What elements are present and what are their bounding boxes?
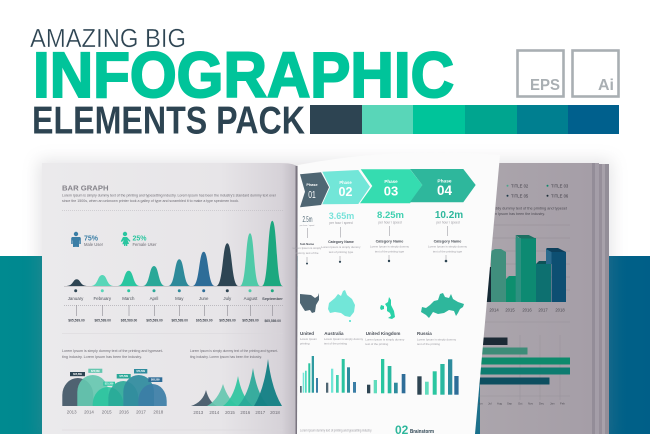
page stack edges — [592, 163, 609, 434]
peak chart — [191, 359, 282, 406]
country text: text of the printing — [324, 342, 347, 346]
category text: text of printing type — [329, 250, 354, 254]
phase metrics — [300, 210, 463, 227]
bar 2018 — [546, 248, 566, 302]
month labels: April — [150, 296, 158, 301]
phase metrics: per hour / speed — [436, 220, 460, 224]
arrow: phase 03: 03 — [384, 184, 398, 198]
horizontal chart month labels: Feb — [560, 402, 565, 406]
month labels: September — [262, 296, 283, 301]
bar group 2 — [326, 359, 356, 393]
arrow: phase 04: Phase — [437, 178, 452, 184]
arrow: phase 01: Phase — [306, 183, 318, 187]
arc chart tags: $78,589 — [91, 370, 100, 373]
phase arrows — [300, 169, 476, 207]
peak chart years — [193, 410, 280, 415]
arc chart years: 2017 — [136, 410, 146, 414]
bar 2015 — [506, 276, 521, 302]
arc chart text — [62, 349, 163, 359]
country names — [300, 331, 432, 336]
country names: United Kingdom — [366, 331, 400, 336]
stat: female: 25% — [132, 236, 147, 242]
map: UK — [380, 297, 395, 319]
arc chart text: Lorem Ipsum is simply dummy text of the printing and typesset- — [62, 349, 163, 353]
stat: female — [132, 236, 157, 247]
book shadow — [38, 160, 612, 434]
value labels: $65,589.00 — [171, 318, 188, 322]
horizontal chart month labels: Jan — [550, 402, 555, 406]
horizontal chart month labels: Dec — [539, 402, 545, 406]
stat: male — [84, 236, 104, 247]
peak chart years: 2015 — [225, 410, 235, 415]
bar 2017 — [536, 261, 551, 302]
legend: TITLE 05 — [511, 193, 529, 198]
peak chart text: Lorem Ipsum is simply dummy text of the printing and typeset- — [190, 349, 278, 353]
panel: turning middle page — [293, 152, 500, 434]
category text: text of the printing type — [375, 250, 405, 254]
arc chart — [62, 375, 167, 406]
arc chart years: 2018 — [153, 410, 164, 414]
arc chart text: ting industry. Lorem Ipsum has been the industry. — [62, 355, 142, 359]
icon: EPS file: EPS — [530, 77, 560, 94]
month labels: July — [223, 296, 232, 301]
month labels — [68, 296, 283, 301]
arrow: phase 04: 04 — [437, 183, 452, 198]
intro text: since the 1500s, when an unknown printer took a galley of type and scrambled it to make a type specimen book. — [62, 199, 239, 203]
arrow: phase 01: 01 — [308, 189, 316, 201]
peak chart text — [190, 349, 278, 359]
arrow: phase 04 — [410, 169, 476, 202]
3D chart years: 2018 — [555, 308, 565, 312]
icon: Ai file: Ai — [598, 77, 614, 94]
bar 2016 — [516, 235, 536, 302]
horizontal chart month labels: Oct — [518, 402, 523, 406]
country names: Russia — [417, 331, 432, 336]
value labels: $65,589.00 — [196, 318, 213, 322]
peak chart years: 2014 — [209, 410, 220, 415]
3D chart years: 2016 — [522, 308, 532, 312]
arc chart years: 2013 — [67, 410, 77, 414]
intro text — [62, 194, 277, 203]
country text: Lorem Ipsum is simply dummy — [365, 338, 405, 342]
arc chart years: 2016 — [119, 410, 129, 414]
phase metrics: 3.65m — [329, 211, 354, 221]
title line: elements pack: ELEMENTS PACK — [32, 100, 305, 142]
arrow: phase 01 — [300, 172, 329, 207]
arc chart years: 2014 — [84, 410, 94, 414]
3D bar chart — [486, 225, 570, 302]
bell chart — [64, 221, 283, 292]
month labels: May — [175, 296, 184, 301]
legend — [506, 183, 569, 198]
arc chart tags: $65,589 — [151, 379, 160, 382]
category text: Category Name — [376, 240, 403, 244]
month labels: June — [199, 296, 209, 301]
horizontal chart month labels: Jul — [488, 402, 492, 406]
heading: bar graph: BAR GRAPH — [62, 184, 108, 192]
value ticks — [76, 305, 273, 316]
arrow: phase 03: Phase — [384, 179, 398, 184]
category text: dummy text of the — [296, 251, 319, 255]
horizontal bar chart — [478, 322, 570, 400]
country names: United — [300, 331, 314, 336]
right page text — [495, 206, 567, 216]
title block — [30, 25, 454, 142]
arc chart years — [67, 410, 164, 414]
peak chart years: 2017 — [255, 410, 266, 415]
phase metrics: per hour / speed — [378, 220, 402, 224]
bar group 1 — [300, 356, 318, 393]
peak chart text: ting industry. Lorem Ipsum has been the industry. — [190, 355, 262, 359]
value labels: $65,589.00 — [94, 318, 111, 322]
value labels — [68, 318, 281, 323]
3D chart years: 2015 — [505, 308, 515, 312]
icon: male user — [71, 232, 81, 247]
arc chart tags: $25,589 — [105, 383, 114, 386]
value labels: $65,589.00 — [121, 318, 137, 322]
value labels: $65,589.00 — [264, 319, 281, 323]
bar charts — [300, 356, 459, 395]
icon: female user — [121, 232, 130, 246]
colour palette bar — [310, 105, 619, 134]
category text — [293, 240, 468, 255]
peak chart years: 2018 — [270, 410, 280, 415]
category text: text of the printing type — [433, 250, 463, 254]
3D chart years: 2017 — [538, 308, 548, 312]
bottom text: Lorem Ipsum dummy text of printing and typesetting industry. — [300, 428, 372, 432]
bar group 3 — [367, 359, 405, 393]
category text: Category Name — [328, 240, 354, 244]
category text: Lorem Ipsum is simply dummy — [321, 245, 361, 249]
phase metrics: 8.25m — [377, 210, 404, 221]
connector lines — [307, 226, 448, 262]
spine shadow — [296, 166, 298, 434]
phase metrics: 2.5m — [302, 215, 313, 224]
category text: Lorem Ipsum is simply dummy — [370, 244, 410, 248]
icon: EPS file — [518, 50, 564, 96]
3D chart years: 2014 — [489, 308, 499, 312]
3D chart years — [489, 308, 565, 312]
country text: text of the printing — [417, 342, 440, 346]
country text: Lorem Ipsum — [300, 337, 317, 341]
country text: Lorem Ipsum is simply dummy — [417, 338, 457, 342]
peak chart years: 2013 — [193, 410, 204, 415]
arc chart tags: $75,589 — [119, 375, 129, 378]
bar 2014 — [491, 249, 506, 302]
horizontal chart month labels: Aug — [497, 402, 502, 406]
category text: Lorem Ipsum is simply dummy — [428, 244, 468, 248]
stat: male: Male User — [84, 242, 104, 247]
right page text: n Ipsum has been the industry. — [495, 212, 545, 216]
title line: amazing big: AMAZING BIG — [30, 25, 186, 53]
month labels: August — [244, 296, 258, 301]
map: USA — [300, 293, 319, 313]
legend: TITLE 06 — [551, 193, 569, 198]
horizontal chart month labels: Sep — [507, 402, 512, 406]
category text: Sub Name — [300, 242, 314, 246]
map: Russia — [421, 293, 464, 318]
right page text: ddy dummy text of the printing and typeset — [495, 206, 567, 210]
arrow: phase 02 — [322, 170, 370, 204]
value labels: $65,589.00 — [242, 318, 259, 322]
legend: TITLE 03 — [551, 183, 569, 188]
stat: female: Female User — [132, 242, 157, 247]
category text: Lorem Ipsum is simply — [293, 246, 322, 250]
value labels: $65,589.00 — [68, 318, 85, 322]
peak chart years: 2016 — [240, 410, 251, 415]
bar group 4 — [417, 359, 459, 395]
icon: Ai file — [572, 50, 618, 96]
arc chart years: 2015 — [102, 410, 112, 414]
phase metrics: per hour / speed — [300, 225, 314, 227]
horizontal chart month labels: Nov — [528, 402, 534, 406]
title line: infographic: INFOGRAPHIC — [33, 39, 454, 111]
phase metrics: 10.2m — [435, 210, 463, 221]
country text — [300, 337, 457, 346]
legend: TITLE 02 — [511, 183, 529, 188]
arc chart tags: $73,589 — [136, 370, 146, 373]
arrow: phase 03 — [360, 169, 422, 203]
intro text: Lorem Ipsum is simply dummy text of the printing and typesetting industry. Lorem Ipsum has been the industry's standard dummy text ever — [62, 194, 277, 198]
value labels: $65,589.00 — [219, 318, 236, 322]
country text: printing — [300, 342, 310, 346]
country names: Australia — [324, 331, 344, 336]
arrow: phase 02: 02 — [339, 185, 352, 199]
stat: male: 75% — [84, 236, 99, 242]
category text: Category Name — [434, 240, 461, 244]
arc chart tags — [70, 369, 162, 386]
horizontal chart month labels: Jun — [478, 402, 483, 406]
phase metrics: per hour / speed — [329, 221, 353, 225]
month labels: March — [122, 296, 135, 301]
month labels: February — [94, 296, 112, 301]
month labels: January — [68, 296, 84, 301]
arrow: phase 02: Phase — [339, 180, 352, 185]
country text: Lorem Ipsum is simply dummy — [324, 337, 364, 341]
map: Australia — [328, 290, 355, 322]
background band — [0, 256, 650, 434]
country text: text of the printing — [365, 342, 389, 346]
horizontal chart month labels — [478, 402, 565, 406]
panel: left page — [42, 163, 298, 434]
value labels: $65,589.00 — [146, 318, 163, 322]
connector dots — [306, 260, 447, 264]
arc chart tags: $65,589 — [73, 373, 82, 376]
panel: right page behind — [478, 163, 609, 434]
